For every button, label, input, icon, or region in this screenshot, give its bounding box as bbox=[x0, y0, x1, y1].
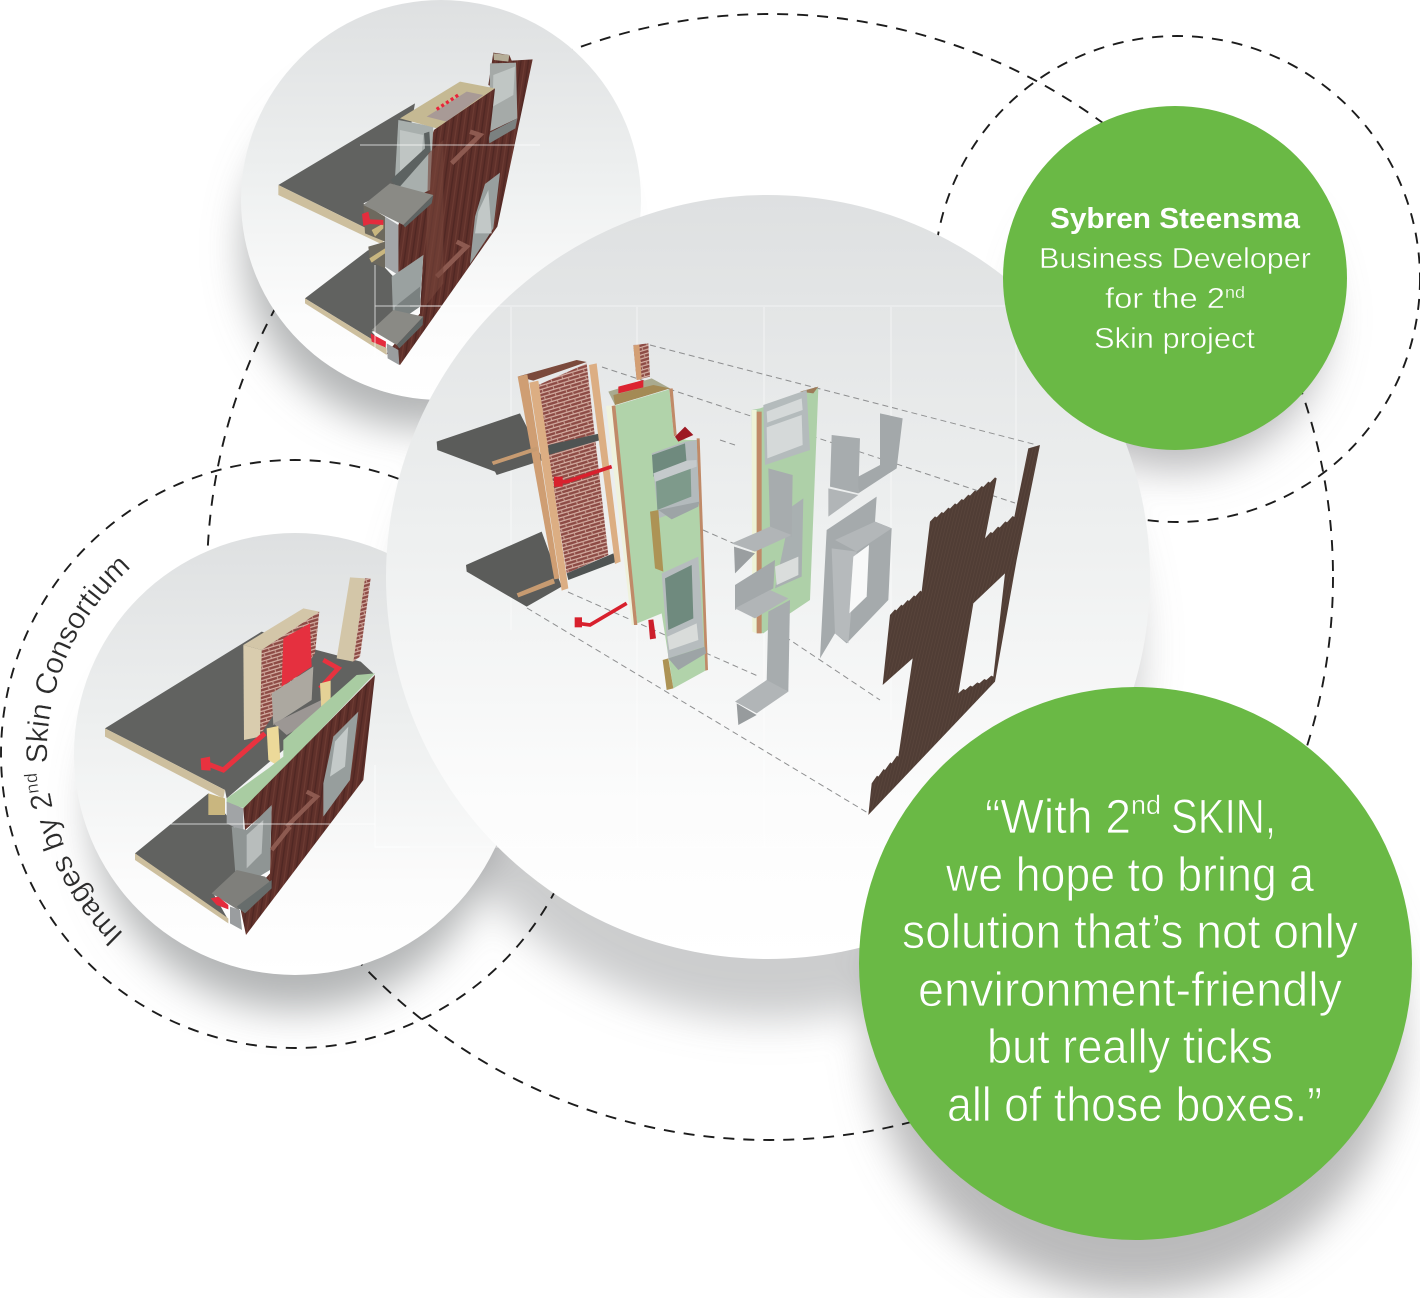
speaker name and role: for the 2 bbox=[1105, 283, 1225, 315]
quote text: nd bbox=[1131, 790, 1161, 820]
quote text: solution that’s not only bbox=[902, 906, 1358, 959]
icon: exploded cladding layers right bbox=[732, 387, 1040, 815]
panel: left circle with cut-away facade bbox=[74, 533, 516, 975]
dashed circle: top right orbit bbox=[934, 36, 1420, 522]
icon: left building section bbox=[105, 577, 375, 935]
quote text: “With 2 bbox=[985, 791, 1131, 844]
quote text: but really ticks bbox=[987, 1021, 1273, 1074]
quote text: all of those boxes.” bbox=[947, 1079, 1322, 1132]
speaker name and role: Skin project bbox=[1094, 323, 1255, 355]
dashed explode guides bbox=[527, 345, 1037, 813]
image credit: nd bbox=[24, 774, 39, 793]
quote text: SKIN, bbox=[1171, 791, 1276, 844]
image credit bbox=[24, 558, 130, 946]
speaker name and role bbox=[1039, 203, 1311, 355]
dashed circle: large orbit bbox=[207, 14, 1333, 1140]
icon: top building section bbox=[278, 53, 533, 365]
panel: top circle with assembled facade bbox=[241, 0, 641, 400]
speaker name and role: nd bbox=[1225, 283, 1245, 302]
panel: green quote circle bbox=[859, 687, 1412, 1240]
speaker name and role: Sybren Steensma bbox=[1050, 203, 1301, 235]
quote text bbox=[902, 790, 1358, 1132]
icon: exploded wall layers left bbox=[437, 343, 708, 690]
image credit: Skin Consortium bbox=[26, 558, 130, 762]
panel: central circle with exploded facade bbox=[375, 195, 1150, 959]
speaker name and role: Business Developer bbox=[1039, 243, 1311, 275]
quote text: environment-friendly bbox=[918, 964, 1342, 1017]
image credit: Images by 2 bbox=[30, 793, 122, 946]
quote text: we hope to bring a bbox=[945, 849, 1314, 902]
panel: green profile circle bbox=[1003, 106, 1347, 450]
icon: timber cladding sheet bbox=[868, 445, 1040, 815]
dashed circle: left orbit bbox=[1, 460, 589, 1048]
